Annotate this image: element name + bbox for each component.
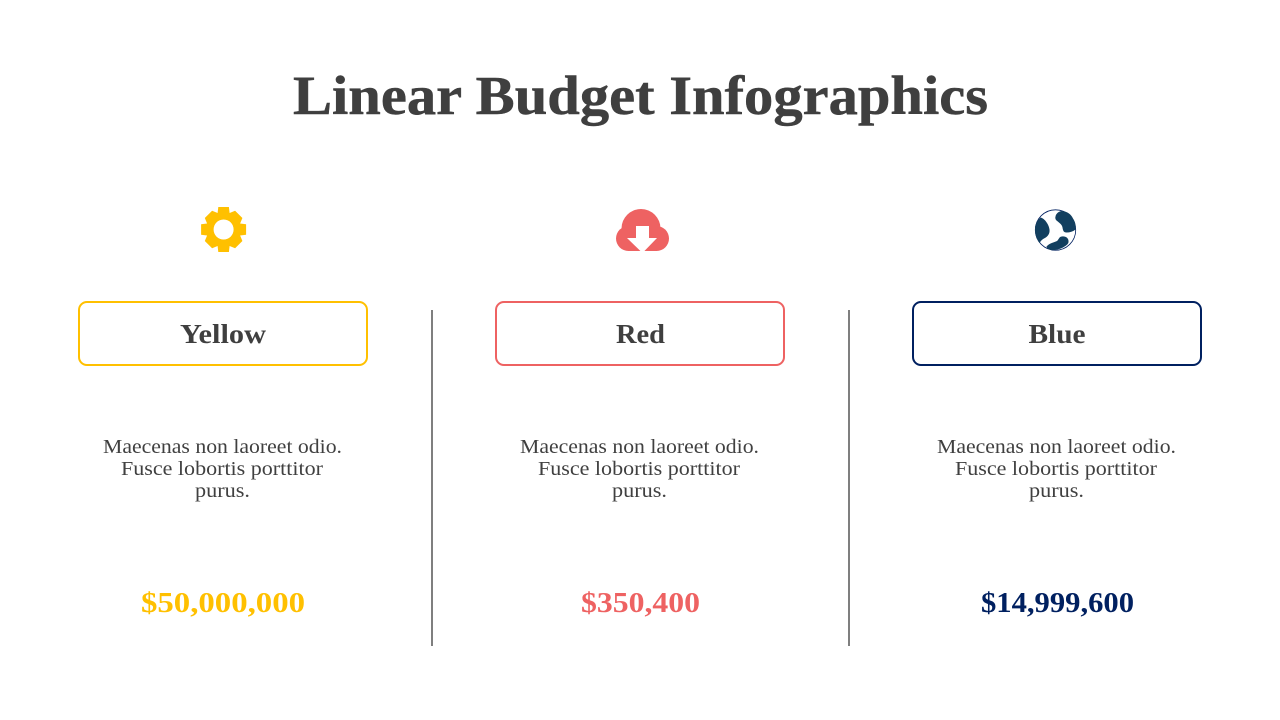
label: Blue: Blue [1028,319,1086,349]
label box: Yellow [79,302,367,365]
panel: blue [913,210,1201,619]
text block: yellow description [103,436,342,502]
icon: globe [1035,210,1076,250]
text block: red description [520,436,759,502]
text block: blue description: Maecenas non laoreet odio. [937,436,1176,458]
amount: yellow: $50,000,000 [141,587,305,619]
icon: cloud download [616,209,669,253]
text block: blue description [937,436,1176,502]
panel: red [496,209,784,619]
divider 1 [431,310,433,646]
label: Red: Red [616,319,665,349]
icon: gear [201,207,246,252]
divider 2 [848,310,850,646]
label: Yellow: Yellow [180,319,267,349]
text block: yellow description: Fusce lobortis porttitor [121,458,323,480]
title: Linear Budget Infographics [293,65,988,126]
panel: yellow [79,207,367,619]
text block: red description: Maecenas non laoreet odio. [520,436,759,458]
text block: red description: Fusce lobortis porttitor [538,458,740,480]
text block: yellow description: Maecenas non laoreet odio. [103,436,342,458]
label box: Blue [913,302,1201,365]
text block: blue description: purus. [1029,480,1084,502]
text block: red description: purus. [612,480,667,502]
text block: blue description: Fusce lobortis porttitor [955,458,1157,480]
text block: yellow description: purus. [195,480,250,502]
label box: Red [496,302,784,365]
amount: blue: $14,999,600 [981,587,1134,619]
amount: red: $350,400 [581,587,700,619]
